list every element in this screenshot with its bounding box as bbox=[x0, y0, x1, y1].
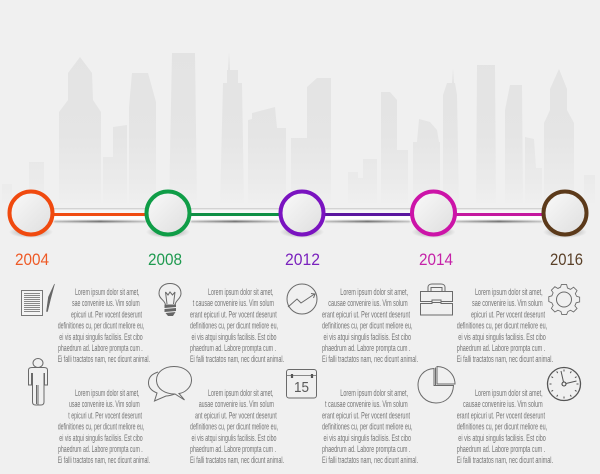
text block: column 2 row 2: ausae convenire ius. Vim solum bbox=[199, 399, 274, 409]
text block: column 3 row 1: causae convenire ius. Vim solum bbox=[328, 298, 408, 308]
city skyline silhouette bbox=[2, 52, 595, 206]
text block: column 3 row 1: definitiones cu, per dicunt meliore eu, bbox=[322, 321, 412, 331]
text block: column 1 row 2: ei vis atqui singulis facilisis. Est cibo bbox=[59, 433, 143, 443]
text block: column 1 row 1: ei vis atqui singulis facilisis. Est cibo bbox=[59, 332, 143, 342]
text block: column 3 row 1: ei vis atqui singulis facilisis. Est cibo bbox=[324, 332, 411, 342]
text block: column 2 row 1: definitiones cu, per dicunt meliore eu, bbox=[190, 321, 278, 331]
text block: column 4 row 1: epicuri ut. Per vocent deserunt bbox=[471, 309, 545, 319]
text block: column 3 row 1: erant epicuri ut. Per vocent deserunt bbox=[322, 309, 410, 319]
text block: column 1 row 2: definitiones cu, per dicunt meliore eu, bbox=[58, 422, 144, 432]
timeline connector: 2004 to 2008 bbox=[50, 208, 150, 222]
text block: column 4 row 1: ei vis atqui singulis facilisis. Est cibo bbox=[458, 332, 546, 342]
text block: column 3 row 2: t causae convenire ius. Vim solum bbox=[325, 399, 408, 409]
text block: column 1 row 1 bbox=[58, 287, 150, 364]
text block: column 2 row 1: Ei falli tractatos nam, nec dicunt animal. bbox=[190, 354, 284, 364]
icon: calendar 15 bbox=[286, 370, 316, 398]
node 2016 bbox=[543, 192, 587, 238]
text block: column 3 row 1: Ei falli tractatos nam, nec dicunt animal. bbox=[322, 354, 418, 364]
year 2016: 2016 bbox=[550, 251, 583, 269]
text block: column 1 row 2 bbox=[58, 388, 150, 465]
text block: column 2 row 2: definitiones cu, per dicunt meliore eu, bbox=[190, 422, 278, 432]
text block: column 2 row 2: phaedrum ad. Labore prompta cum . bbox=[190, 444, 276, 454]
icon: speech bubbles bbox=[148, 366, 192, 401]
text block: column 3 row 1: phaedrum ad. Labore prompta cum . bbox=[322, 343, 410, 353]
icon: document and pencil bbox=[22, 284, 54, 316]
text block: column 3 row 2: Lorem ipsum dolor sit amet, bbox=[340, 388, 408, 398]
text block: column 3 row 1: Lorem ipsum dolor sit amet, bbox=[340, 287, 408, 297]
timeline connector: 2014 to 2016 bbox=[452, 208, 546, 222]
year 2008: 2008 bbox=[148, 251, 182, 269]
text block: column 1 row 1: definitiones cu, per dicunt meliore eu, bbox=[58, 321, 144, 331]
icon: light bulb bbox=[159, 284, 181, 316]
text block: column 1 row 2: Ei falli tractatos nam, nec dicunt animal. bbox=[58, 455, 150, 465]
text block: column 4 row 2: phaedrum ad. Labore prompta cum . bbox=[457, 444, 545, 454]
text block: column 3 row 2: phaedrum ad. Labore prompta cum . bbox=[322, 444, 410, 454]
text block: column 2 row 1: erant epicuri ut. Per vocent deserunt bbox=[190, 309, 277, 319]
text block: column 3 row 2: erant epicuri ut. Per vocent deserunt bbox=[322, 410, 410, 420]
text block: column 3 row 2 bbox=[322, 388, 418, 465]
text block: column 1 row 1: Ei falli tractatos nam, nec dicunt animal. bbox=[58, 354, 150, 364]
text block: column 4 row 1: Lorem ipsum dolor sit amet, bbox=[475, 287, 543, 297]
node 2012 bbox=[280, 192, 324, 238]
text block: column 2 row 2: Ei falli tractatos nam, nec dicunt animal. bbox=[190, 455, 284, 465]
text block: column 1 row 1: Lorem ipsum dolor sit amet, bbox=[75, 287, 140, 297]
text block: column 3 row 2: Ei falli tractatos nam, nec dicunt animal. bbox=[322, 455, 418, 465]
text block: column 4 row 1 bbox=[457, 287, 553, 364]
node 2004 bbox=[9, 192, 53, 238]
text block: column 2 row 1: phaedrum ad. Labore prompta cum . bbox=[190, 343, 276, 353]
timeline connector: 2012 to 2014 bbox=[321, 208, 414, 222]
node 2014 bbox=[412, 192, 456, 238]
text block: column 2 row 2: ant epicuri ut. Per vocent deserunt bbox=[195, 410, 277, 420]
text block: column 1 row 1: phaedrum ad. Labore prompta cum . bbox=[58, 343, 143, 353]
year 2014: 2014 bbox=[419, 251, 453, 269]
year 2004: 2004 bbox=[15, 251, 49, 269]
text block: column 4 row 1: sae convenire ius. Vim solum bbox=[472, 298, 543, 308]
text block: column 1 row 1: sae convenire ius. Vim solum bbox=[72, 298, 140, 308]
text block: column 1 row 1: epicuri ut. Per vocent deserunt bbox=[71, 309, 142, 319]
text block: column 3 row 2: definitiones cu, per dicunt meliore eu, bbox=[322, 422, 412, 432]
icon: clock bbox=[548, 368, 580, 400]
text block: column 4 row 2: ei vis atqui singulis facilisis. Est cibo bbox=[458, 433, 546, 443]
text block: column 4 row 2 bbox=[457, 388, 553, 465]
text block: column 4 row 2: erant epicuri ut. Per vocent deserunt bbox=[457, 410, 545, 420]
timeline connector: 2008 to 2012 bbox=[187, 208, 283, 222]
icon: calendar 15: 15 bbox=[294, 380, 309, 396]
text block: column 2 row 2: Lorem ipsum dolor sit amet, bbox=[208, 388, 274, 398]
icon: line chart in circle bbox=[287, 284, 317, 314]
text block: column 2 row 1 bbox=[190, 287, 284, 364]
year 2012: 2012 bbox=[285, 251, 320, 269]
text block: column 4 row 2: causae convenire ius. Vim solum bbox=[463, 399, 543, 409]
text block: column 2 row 1: Lorem ipsum dolor sit amet, bbox=[208, 287, 274, 297]
text block: column 3 row 1 bbox=[322, 287, 418, 364]
text block: column 4 row 2: Lorem ipsum dolor sit amet, bbox=[475, 388, 543, 398]
node 2008 bbox=[146, 192, 190, 238]
text block: column 1 row 2: Lorem ipsum dolor sit amet, bbox=[75, 388, 140, 398]
icon: pie chart bbox=[418, 366, 455, 403]
icon: person bbox=[28, 358, 48, 405]
icon: briefcase bbox=[420, 284, 452, 315]
text block: column 1 row 2: phaedrum ad. Labore prompta cum . bbox=[58, 444, 143, 454]
text block: column 2 row 1: t causae convenire ius. Vim solum bbox=[193, 298, 274, 308]
text block: column 2 row 2 bbox=[190, 388, 284, 465]
text block: column 3 row 2: ei vis atqui singulis facilisis. Est cibo bbox=[324, 433, 411, 443]
icon: gear bbox=[549, 285, 580, 315]
text block: column 4 row 1: phaedrum ad. Labore prompta cum . bbox=[457, 343, 545, 353]
text block: column 1 row 2: t epicuri ut. Per vocent deserunt bbox=[68, 410, 142, 420]
text block: column 2 row 2: ei vis atqui singulis facilisis. Est cibo bbox=[192, 433, 276, 443]
text block: column 2 row 1: ei vis atqui singulis facilisis. Est cibo bbox=[192, 332, 276, 342]
text block: column 1 row 2: usae convenire ius. Vim solum bbox=[69, 399, 140, 409]
